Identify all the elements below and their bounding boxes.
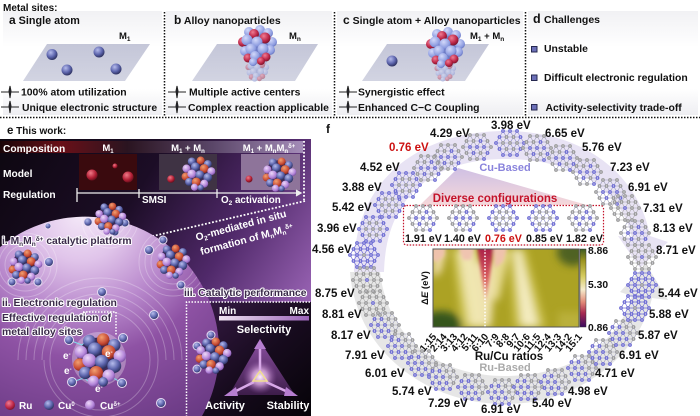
- panel d: challenges: [528, 11, 698, 115]
- composition band: [0, 141, 303, 153]
- Ru-based energy labels: 5.40 eV: [532, 398, 572, 410]
- Ru-based energy labels: 6.01 eV: [365, 368, 405, 380]
- Cu-based energy labels: 5.42 eV: [332, 202, 372, 214]
- column M1 + MnMn delta: δ+: [288, 144, 296, 150]
- Cu-based energy labels: 8.13 eV: [653, 223, 693, 235]
- column M1 + MnMn delta: n: [284, 149, 288, 155]
- Cu-based arc arrow: [354, 131, 668, 272]
- nanoparticle left: [9, 250, 42, 284]
- Ru-based energy labels: 5.74 eV: [392, 386, 432, 398]
- support plane: [23, 44, 150, 81]
- Cu-based energy labels: 4.29 eV: [430, 128, 470, 140]
- x tick labels: 13:3: [543, 332, 564, 354]
- nanoparticle top: [95, 203, 126, 235]
- model M1 + MnMn delta: [241, 154, 300, 192]
- Ru-based energy labels: 6.91 eV: [619, 350, 659, 362]
- benefit: complex reactions: Complex reaction applicable: [188, 103, 329, 114]
- x tick labels: 2:14: [428, 332, 450, 354]
- label M1 + Mn: n: [500, 36, 504, 43]
- x tick labels: [418, 332, 585, 354]
- electron labels: e: [95, 384, 101, 395]
- benefit: coupling: Enhanced C−C Coupling: [358, 103, 480, 114]
- reflection: [245, 57, 269, 82]
- label stability: Stability: [267, 400, 310, 412]
- model M1 + Mn: [159, 154, 217, 191]
- catalyst sphere: [0, 216, 218, 416]
- legend: Cu: [100, 401, 113, 412]
- diverse configurations callout box: 0.85 eV: [526, 233, 564, 245]
- label Ru-Based: Ru-Based: [479, 362, 531, 374]
- text effective regulation: Effective regulation of: [2, 313, 112, 324]
- column M1 + MnMn delta: 1: [251, 149, 255, 155]
- colour bar values: 8.86: [588, 246, 608, 257]
- Ru-based energy labels: 4.71 eV: [595, 368, 635, 380]
- electron labels: [63, 352, 112, 392]
- large regulated nanoparticle: [64, 332, 128, 388]
- column M1 + Mn: + M: [182, 143, 201, 154]
- panel b: alloy nanoparticles: [166, 11, 332, 115]
- rotated O2 mediated caption: δ+: [284, 222, 294, 231]
- electron labels: -: [69, 352, 71, 358]
- Ru-based energy labels: 8.81 eV: [322, 309, 362, 321]
- reflection: [434, 59, 456, 82]
- panel a: single atom: [1, 11, 162, 115]
- y axis title: ΔE (eV): [420, 271, 431, 305]
- rotated O2 mediated caption: O: [195, 231, 205, 244]
- label i catalytic platform: i. M: [2, 236, 19, 247]
- diverse configurations callout box: 1.91 eV: [405, 233, 443, 245]
- Ru-based energy labels: 8.17 eV: [331, 330, 371, 342]
- Ru-based arc arrow: [350, 264, 668, 404]
- panel f: configurations and heatmap: [312, 120, 698, 416]
- diverse configurations callout box: 1.40 eV: [444, 233, 482, 245]
- Cu-based energy labels: [312, 120, 696, 257]
- diverse configurations callout box: [404, 206, 604, 245]
- column M1 + Mn: M: [171, 143, 179, 154]
- Cu-based energy labels: 6.65 eV: [545, 128, 585, 140]
- star bullet 1: [1, 86, 19, 98]
- lower right dark area: [202, 302, 311, 416]
- star bullet 2: [1, 101, 19, 113]
- legend: Ru: [19, 401, 32, 412]
- rotated O2 mediated caption: n: [282, 229, 287, 237]
- panel b heading: b Alloy nanoparticles: [174, 13, 281, 27]
- star bullet 2: [168, 101, 186, 113]
- electron labels: -: [101, 385, 103, 391]
- star bullet 2: [339, 101, 357, 113]
- panel d heading: Challenges: [544, 14, 600, 26]
- label activity: Activity: [205, 400, 246, 412]
- column M1 + MnMn delta: + M: [254, 143, 273, 154]
- x tick labels: 8:8: [494, 332, 512, 350]
- support plane: [362, 44, 489, 81]
- heading: metal sites: Metal sites:: [3, 3, 57, 14]
- heading: this work: e This work:: [7, 125, 66, 137]
- Ru-based energy labels: 7.29 eV: [428, 398, 468, 410]
- column M1 + MnMn delta: M: [276, 143, 284, 154]
- label i catalytic platform: M: [23, 236, 32, 247]
- electron labels: -: [111, 350, 113, 356]
- x tick labels: 14:2: [553, 332, 575, 354]
- model M1: [79, 154, 137, 190]
- performance nanoparticle: [193, 331, 231, 374]
- label O2 activation: activation: [232, 195, 281, 206]
- alloy nanoparticle: [238, 25, 277, 66]
- panel c heading: c Single atom + Alloy nanoparticles: [343, 13, 521, 27]
- panel d heading: d: [533, 12, 541, 26]
- label i catalytic platform: n: [32, 241, 36, 248]
- x tick labels: 9:7: [505, 332, 523, 350]
- Cu-based energy labels: 4.56 eV: [312, 244, 352, 256]
- x tick labels: 12:4: [532, 332, 554, 354]
- dotted connector: [140, 141, 305, 239]
- legend: Cu: [58, 401, 71, 412]
- label Mn: M: [289, 31, 297, 42]
- colour bar values: [588, 246, 608, 334]
- diverse configurations callout box: 0.76 eV: [485, 233, 523, 245]
- label M1: 1: [127, 36, 131, 43]
- x axis title: Ru/Cu ratios: [475, 351, 543, 363]
- colour bar values: 0.86: [588, 323, 608, 334]
- min max scale: Min: [219, 306, 236, 317]
- label i catalytic platform: δ+: [36, 236, 44, 243]
- column M1 + MnMn delta: M: [243, 143, 251, 154]
- single atoms: [46, 46, 122, 76]
- panel c: single atom plus alloy: [337, 11, 523, 115]
- rotated O2 mediated caption: formation of M: [199, 229, 271, 258]
- colour bar: [580, 249, 586, 327]
- heading diverse configurations: Diverse configurations: [433, 193, 557, 205]
- x tick labels: 7:9: [484, 332, 502, 350]
- electron labels: -: [70, 367, 72, 373]
- rotated O2 mediated caption: -mediated in situ: [206, 209, 288, 241]
- row label model: Model: [3, 169, 33, 180]
- star bullet 1: [168, 86, 186, 98]
- rotated O2 mediated caption: M: [272, 226, 283, 238]
- column M1: 1: [110, 149, 114, 155]
- x tick labels: 4:12: [449, 332, 471, 354]
- Ru-based clusters: [353, 268, 656, 404]
- x tick labels: 5:11: [460, 332, 481, 354]
- Cu-based energy labels: 3.96 eV: [317, 223, 357, 235]
- Ru-based energy labels: 7.91 eV: [345, 350, 385, 362]
- Cu-based energy labels: 7.31 eV: [643, 203, 683, 215]
- row label regulation: Regulation: [3, 190, 56, 201]
- label O2 activation: O: [221, 195, 229, 206]
- label ii electronic regulation: ii. Electronic regulation: [2, 298, 117, 309]
- label Cu-Based: Cu-Based: [479, 162, 531, 174]
- Ru-based energy labels: [315, 288, 698, 416]
- dotted optimal line: [484, 249, 486, 327]
- label SMSI: SMSI: [142, 195, 167, 206]
- electron labels: e: [63, 351, 69, 362]
- Cu-based clusters: [350, 131, 656, 269]
- benefit: electronic structure: Unique electronic structure: [22, 103, 157, 114]
- supported atoms: [8, 218, 185, 408]
- min max scale: [219, 306, 309, 320]
- rotated O2 mediated caption: 2: [204, 235, 209, 243]
- label iii catalytic performance: iii. Catalytic performance: [184, 288, 307, 299]
- min max scale: Max: [290, 306, 309, 317]
- Cu-based energy labels: 3.88 eV: [342, 182, 382, 194]
- label M1 + Mn: M: [470, 31, 478, 42]
- rotated O2 mediated caption: n: [270, 233, 275, 240]
- nanoparticle right: [157, 245, 190, 279]
- label M1: M: [119, 31, 127, 42]
- label M1 + Mn: + M: [482, 31, 500, 42]
- challenge: trade-off: Activity-selectivity trade-off: [546, 103, 682, 114]
- Cu-based energy labels: 3.98 eV: [491, 120, 531, 132]
- dotted callout for ii: [83, 312, 116, 335]
- x tick labels: 6:10: [470, 332, 492, 354]
- alloy nanoparticle: [426, 27, 465, 68]
- legend: [5, 400, 120, 410]
- challenge: unstable: Unstable: [544, 44, 588, 55]
- column M1: M: [102, 143, 110, 154]
- panel e: this work illustration: [0, 139, 311, 416]
- panel a heading: a Single atom: [9, 13, 80, 27]
- Ru-based energy labels: 8.75 eV: [315, 288, 355, 300]
- Ru-based energy labels: 4.98 eV: [568, 386, 608, 398]
- benefit: active centers: Multiple active centers: [189, 88, 301, 98]
- label i catalytic platform: n: [19, 241, 23, 248]
- colour bar values: 5.30: [588, 280, 608, 291]
- label selectivity: Selectivity: [237, 324, 292, 336]
- performance triangle: [224, 339, 298, 396]
- row label composition: Composition: [3, 144, 65, 155]
- Cu-based energy labels: 5.76 eV: [582, 142, 622, 154]
- Cu-based energy labels: 4.52 eV: [360, 162, 400, 174]
- x tick labels: 1:15: [418, 332, 440, 354]
- heatmap: [420, 247, 608, 360]
- Cu-based energy labels: 8.71 eV: [656, 245, 696, 257]
- bullet square: [532, 104, 537, 110]
- legend: δ+: [113, 402, 121, 408]
- dotted callout for iii: [186, 302, 310, 416]
- label O2 activation: 2: [229, 200, 233, 207]
- benefit: synergy: Synergistic effect: [358, 88, 445, 98]
- Ru-based energy labels: 6.91 eV: [481, 404, 521, 416]
- column M1 + Mn: 1: [179, 149, 183, 155]
- x tick labels: 3:13: [439, 332, 460, 354]
- column M1 + MnMn delta: n: [273, 149, 277, 155]
- funnel to callout: [420, 168, 587, 205]
- bullet square: [532, 46, 537, 52]
- electron labels: e: [64, 366, 70, 377]
- Ru-based energy labels: 5.44 eV: [658, 288, 698, 300]
- heading: panel f letter: f: [326, 122, 331, 136]
- label M1 + Mn: 1: [478, 36, 482, 43]
- diverse configurations callout box: 1.82 eV: [566, 233, 604, 245]
- electron labels: e: [105, 349, 111, 360]
- bullet square: [532, 75, 537, 80]
- star bullet 1: [339, 86, 357, 98]
- Cu-based energy labels: 6.91 eV: [628, 182, 668, 194]
- x tick labels: 10:6: [512, 332, 533, 354]
- legend: 0: [71, 402, 75, 408]
- column M1 + Mn: n: [201, 149, 205, 155]
- Ru-based energy labels: 5.87 eV: [638, 330, 678, 342]
- x tick labels: 11:5: [522, 332, 544, 354]
- support plane: [192, 44, 318, 81]
- label i catalytic platform: catalytic platform: [43, 236, 132, 247]
- Cu-based energy labels: 0.76 eV: [389, 142, 429, 154]
- rotated O2 mediated caption: [196, 212, 292, 255]
- regulation timeline arrow: [77, 188, 301, 202]
- Ru-based energy labels: 5.88 eV: [649, 309, 689, 321]
- text metal alloy sites: metal alloy sites: [2, 327, 83, 338]
- benefit: atom utilization: 100% atom utilization: [21, 88, 127, 98]
- label Mn: n: [297, 36, 301, 43]
- single atom: [386, 56, 398, 66]
- Cu-based energy labels: 7.23 eV: [610, 162, 650, 174]
- x tick labels: 15:1: [564, 332, 585, 354]
- challenge: electronic regulation: Difficult electronic regulation: [544, 73, 688, 84]
